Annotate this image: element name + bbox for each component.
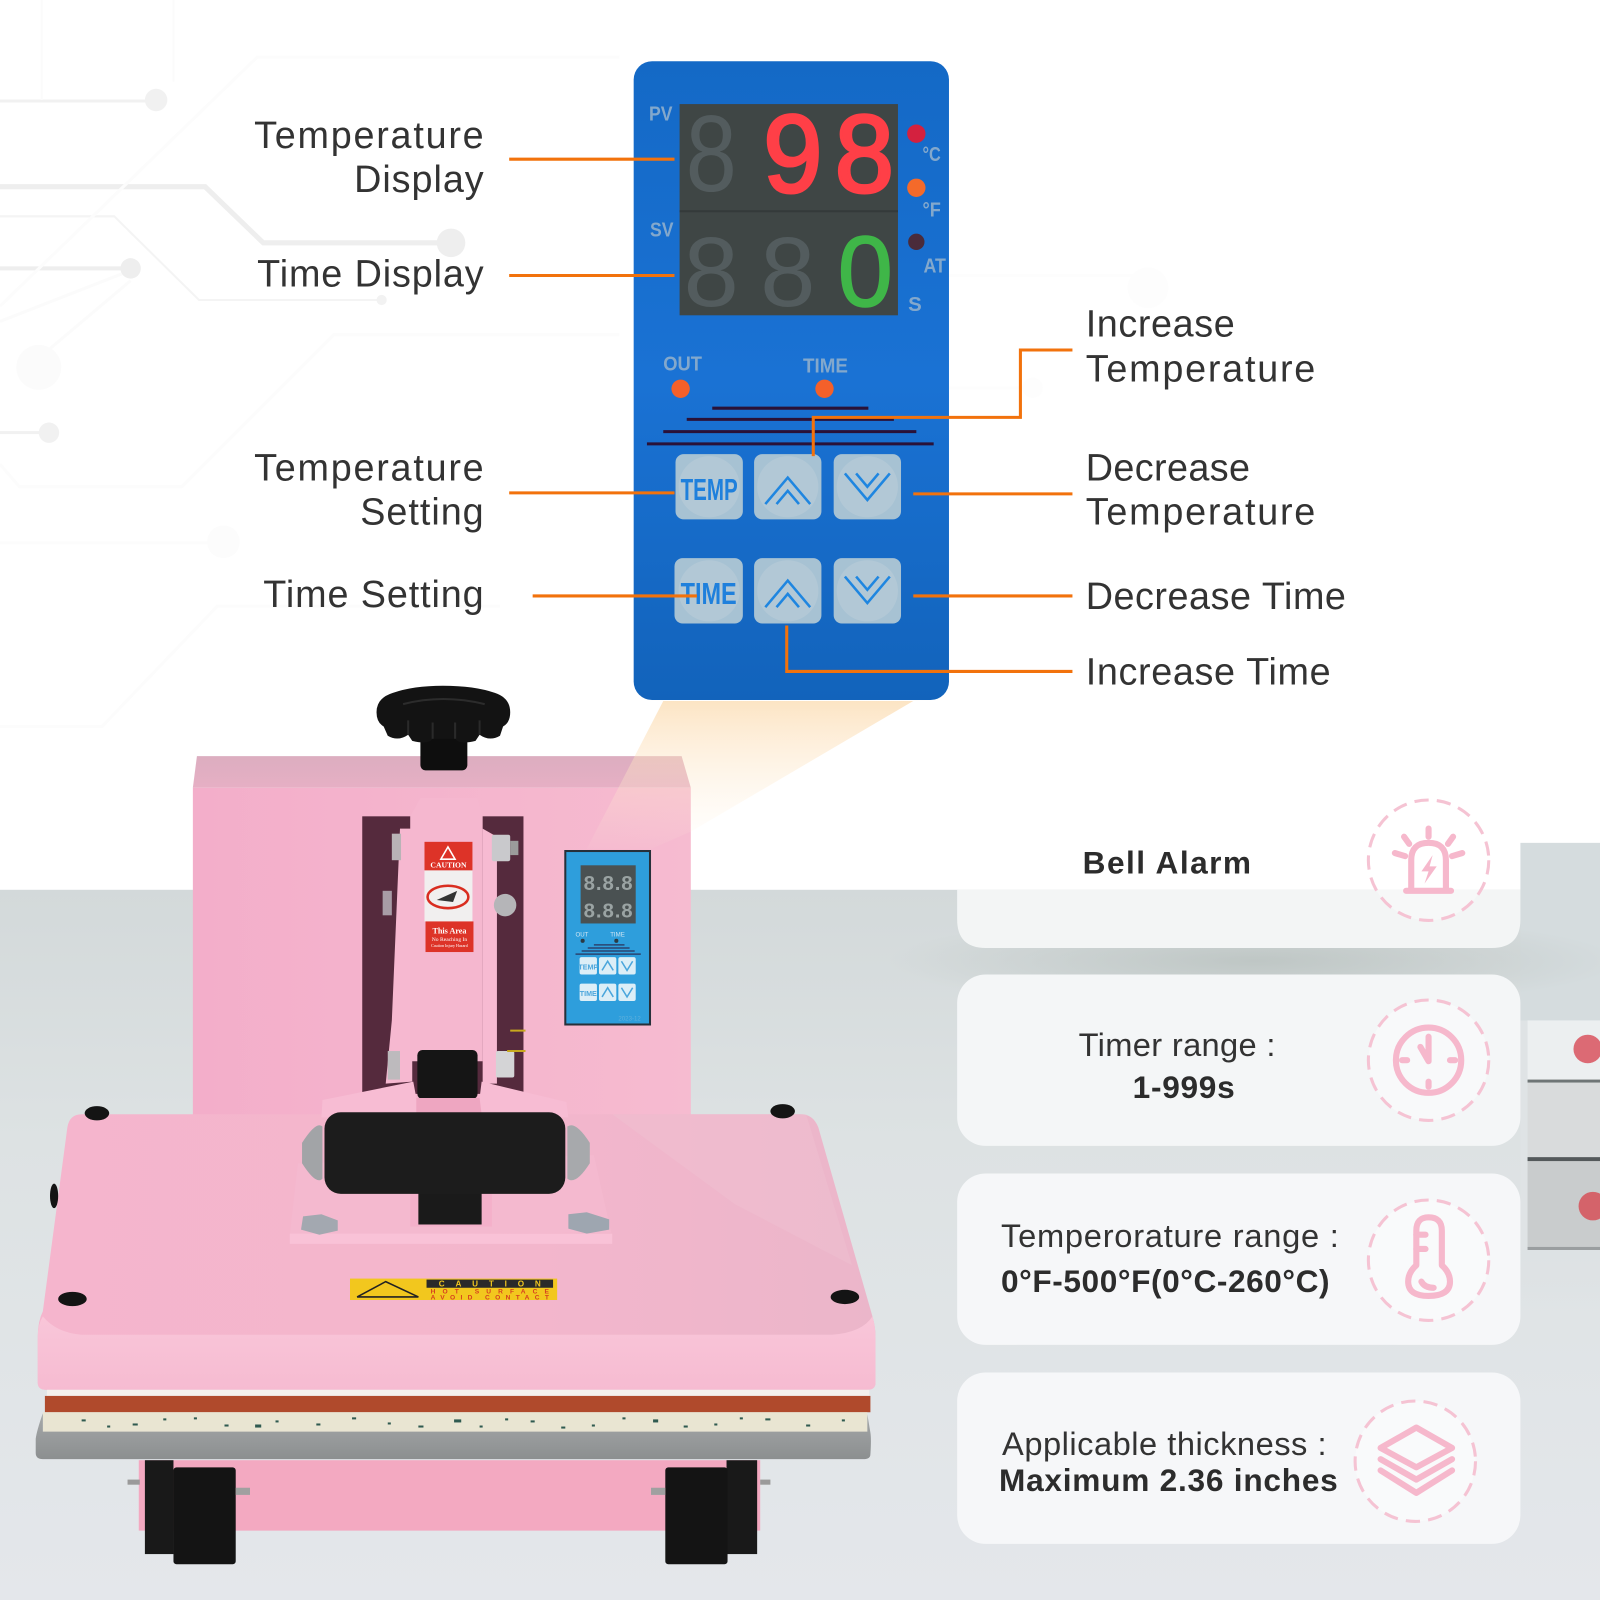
mini controller: TEMP bbox=[578, 963, 598, 971]
panel legends: AT bbox=[923, 255, 946, 277]
caution sticker bbox=[424, 842, 473, 952]
zoom beam from control panel to mini controller bbox=[587, 701, 913, 849]
panel legends: OUT bbox=[663, 353, 703, 375]
heat press machine bbox=[36, 686, 913, 1564]
icon: clock bbox=[1368, 1000, 1489, 1120]
lower pad layers bbox=[43, 1390, 870, 1433]
mini controller: 8.8.8 bbox=[584, 900, 633, 922]
LED display bbox=[680, 93, 898, 328]
card: timer range: 1-999s bbox=[1133, 1069, 1235, 1105]
temperature buttons: TEMP bbox=[681, 473, 738, 507]
panel legends: °F bbox=[922, 199, 941, 221]
callout: Temperature Setting: Setting bbox=[360, 490, 484, 532]
card: applicable thickness bbox=[957, 1372, 1520, 1544]
stepped lines bbox=[647, 408, 934, 444]
base and feet bbox=[128, 1460, 770, 1564]
callout: Temperature Setting bbox=[254, 447, 674, 532]
shadow between first and second card bbox=[888, 914, 1600, 1008]
callout: Decrease Temperature bbox=[913, 447, 1315, 532]
mini controller: 2023-12 bbox=[618, 1015, 641, 1022]
caution sticker: This Area bbox=[432, 927, 467, 936]
panel legends: TIME bbox=[803, 355, 848, 377]
circuit nodes bbox=[16, 89, 1168, 558]
temperature buttons bbox=[676, 454, 901, 519]
callout: Decrease Temperature: Decrease bbox=[1086, 447, 1250, 489]
card: bell alarm bbox=[957, 800, 1520, 948]
time buttons bbox=[674, 558, 901, 623]
callout: Temperature Setting: Temperature bbox=[254, 447, 484, 489]
mini controller: TIME bbox=[610, 932, 625, 939]
hot surface warning sticker: HOT SURFACE bbox=[431, 1288, 550, 1295]
card: bell alarm: Bell Alarm bbox=[1083, 844, 1251, 880]
handle base plate bbox=[290, 1155, 612, 1244]
callout: Temperature Display: Display bbox=[354, 158, 484, 200]
upper platen bbox=[38, 1114, 876, 1390]
callout: Increase Time bbox=[787, 626, 1331, 693]
callout: Increase Temperature: Temperature bbox=[1086, 348, 1315, 390]
platen screws bbox=[50, 1104, 859, 1306]
background: white upper area bbox=[0, 0, 1600, 890]
panel legends: S bbox=[908, 294, 922, 316]
mini controller bbox=[564, 850, 651, 1026]
icon: thermometer bbox=[1368, 1200, 1489, 1320]
icon: siren bbox=[1368, 800, 1489, 920]
background: blurred machines at right bbox=[1520, 843, 1600, 1311]
handle bracket bbox=[321, 1050, 568, 1117]
mini controller: TIME bbox=[580, 990, 597, 998]
card: temperature range: 0°F-500°F(0°C-260°C) bbox=[1001, 1263, 1330, 1299]
callout: Decrease Temperature: Temperature bbox=[1086, 490, 1315, 532]
LED display: 8 bbox=[760, 217, 815, 327]
panel legends: °C bbox=[922, 144, 941, 166]
time buttons: TIME bbox=[681, 577, 737, 611]
callout: Time Display: Time Display bbox=[257, 253, 484, 295]
LED display: 8 bbox=[684, 217, 739, 327]
back housing bbox=[193, 756, 691, 1119]
hot surface warning sticker bbox=[350, 1279, 557, 1301]
card: timer range: Timer range : bbox=[1079, 1026, 1276, 1063]
indicator lights bbox=[671, 124, 926, 398]
caution sticker: Caution Injury Hazard bbox=[431, 943, 468, 948]
card: temperature range bbox=[957, 1173, 1520, 1345]
callout: Increase Temperature bbox=[813, 303, 1315, 456]
handle grip with caps bbox=[302, 1112, 590, 1194]
caution sticker: CAUTION bbox=[430, 860, 467, 869]
card: temperature range: Temperorature range : bbox=[1001, 1217, 1339, 1254]
knob bbox=[377, 686, 510, 770]
hot surface warning sticker: AVOID CONTACT bbox=[431, 1294, 549, 1301]
callout: Decrease Time: Decrease Time bbox=[1086, 575, 1346, 617]
panel legends bbox=[649, 103, 946, 377]
LED display: 8 bbox=[686, 93, 737, 214]
mini controller: OUT bbox=[576, 932, 589, 939]
press arm bbox=[410, 798, 483, 1061]
arm slot bbox=[362, 816, 523, 1094]
side rails and bolts bbox=[383, 829, 526, 1084]
LED display: 8 bbox=[835, 93, 894, 216]
callout: Increase Temperature: Increase bbox=[1086, 303, 1235, 345]
background: grey table surface bbox=[0, 890, 1600, 1600]
callout: Temperature Display: Temperature bbox=[254, 114, 484, 156]
callout: Increase Time: Increase Time bbox=[1086, 651, 1331, 693]
callout: Time Setting: Time Setting bbox=[263, 573, 484, 615]
LED display: 9 bbox=[763, 93, 822, 216]
caution sticker: No Reaching In bbox=[432, 937, 467, 943]
hot surface warning sticker: CAUTION bbox=[439, 1280, 541, 1289]
lower steel plate bbox=[36, 1413, 871, 1459]
panel legends: PV bbox=[649, 103, 673, 125]
callout: Temperature Display bbox=[254, 114, 674, 200]
icon: layers bbox=[1355, 1401, 1476, 1521]
background circuit pattern bbox=[0, 0, 1143, 727]
card: applicable thickness: Maximum 2.36 inches bbox=[999, 1462, 1338, 1498]
mini controller: 8.8.8 bbox=[584, 873, 633, 895]
card: timer range bbox=[957, 974, 1520, 1146]
panel legends: SV bbox=[650, 220, 674, 242]
panel: enlarged control panel bbox=[634, 61, 949, 700]
card: applicable thickness: Applicable thickness : bbox=[1002, 1425, 1327, 1462]
LED display: 0 bbox=[838, 216, 893, 328]
